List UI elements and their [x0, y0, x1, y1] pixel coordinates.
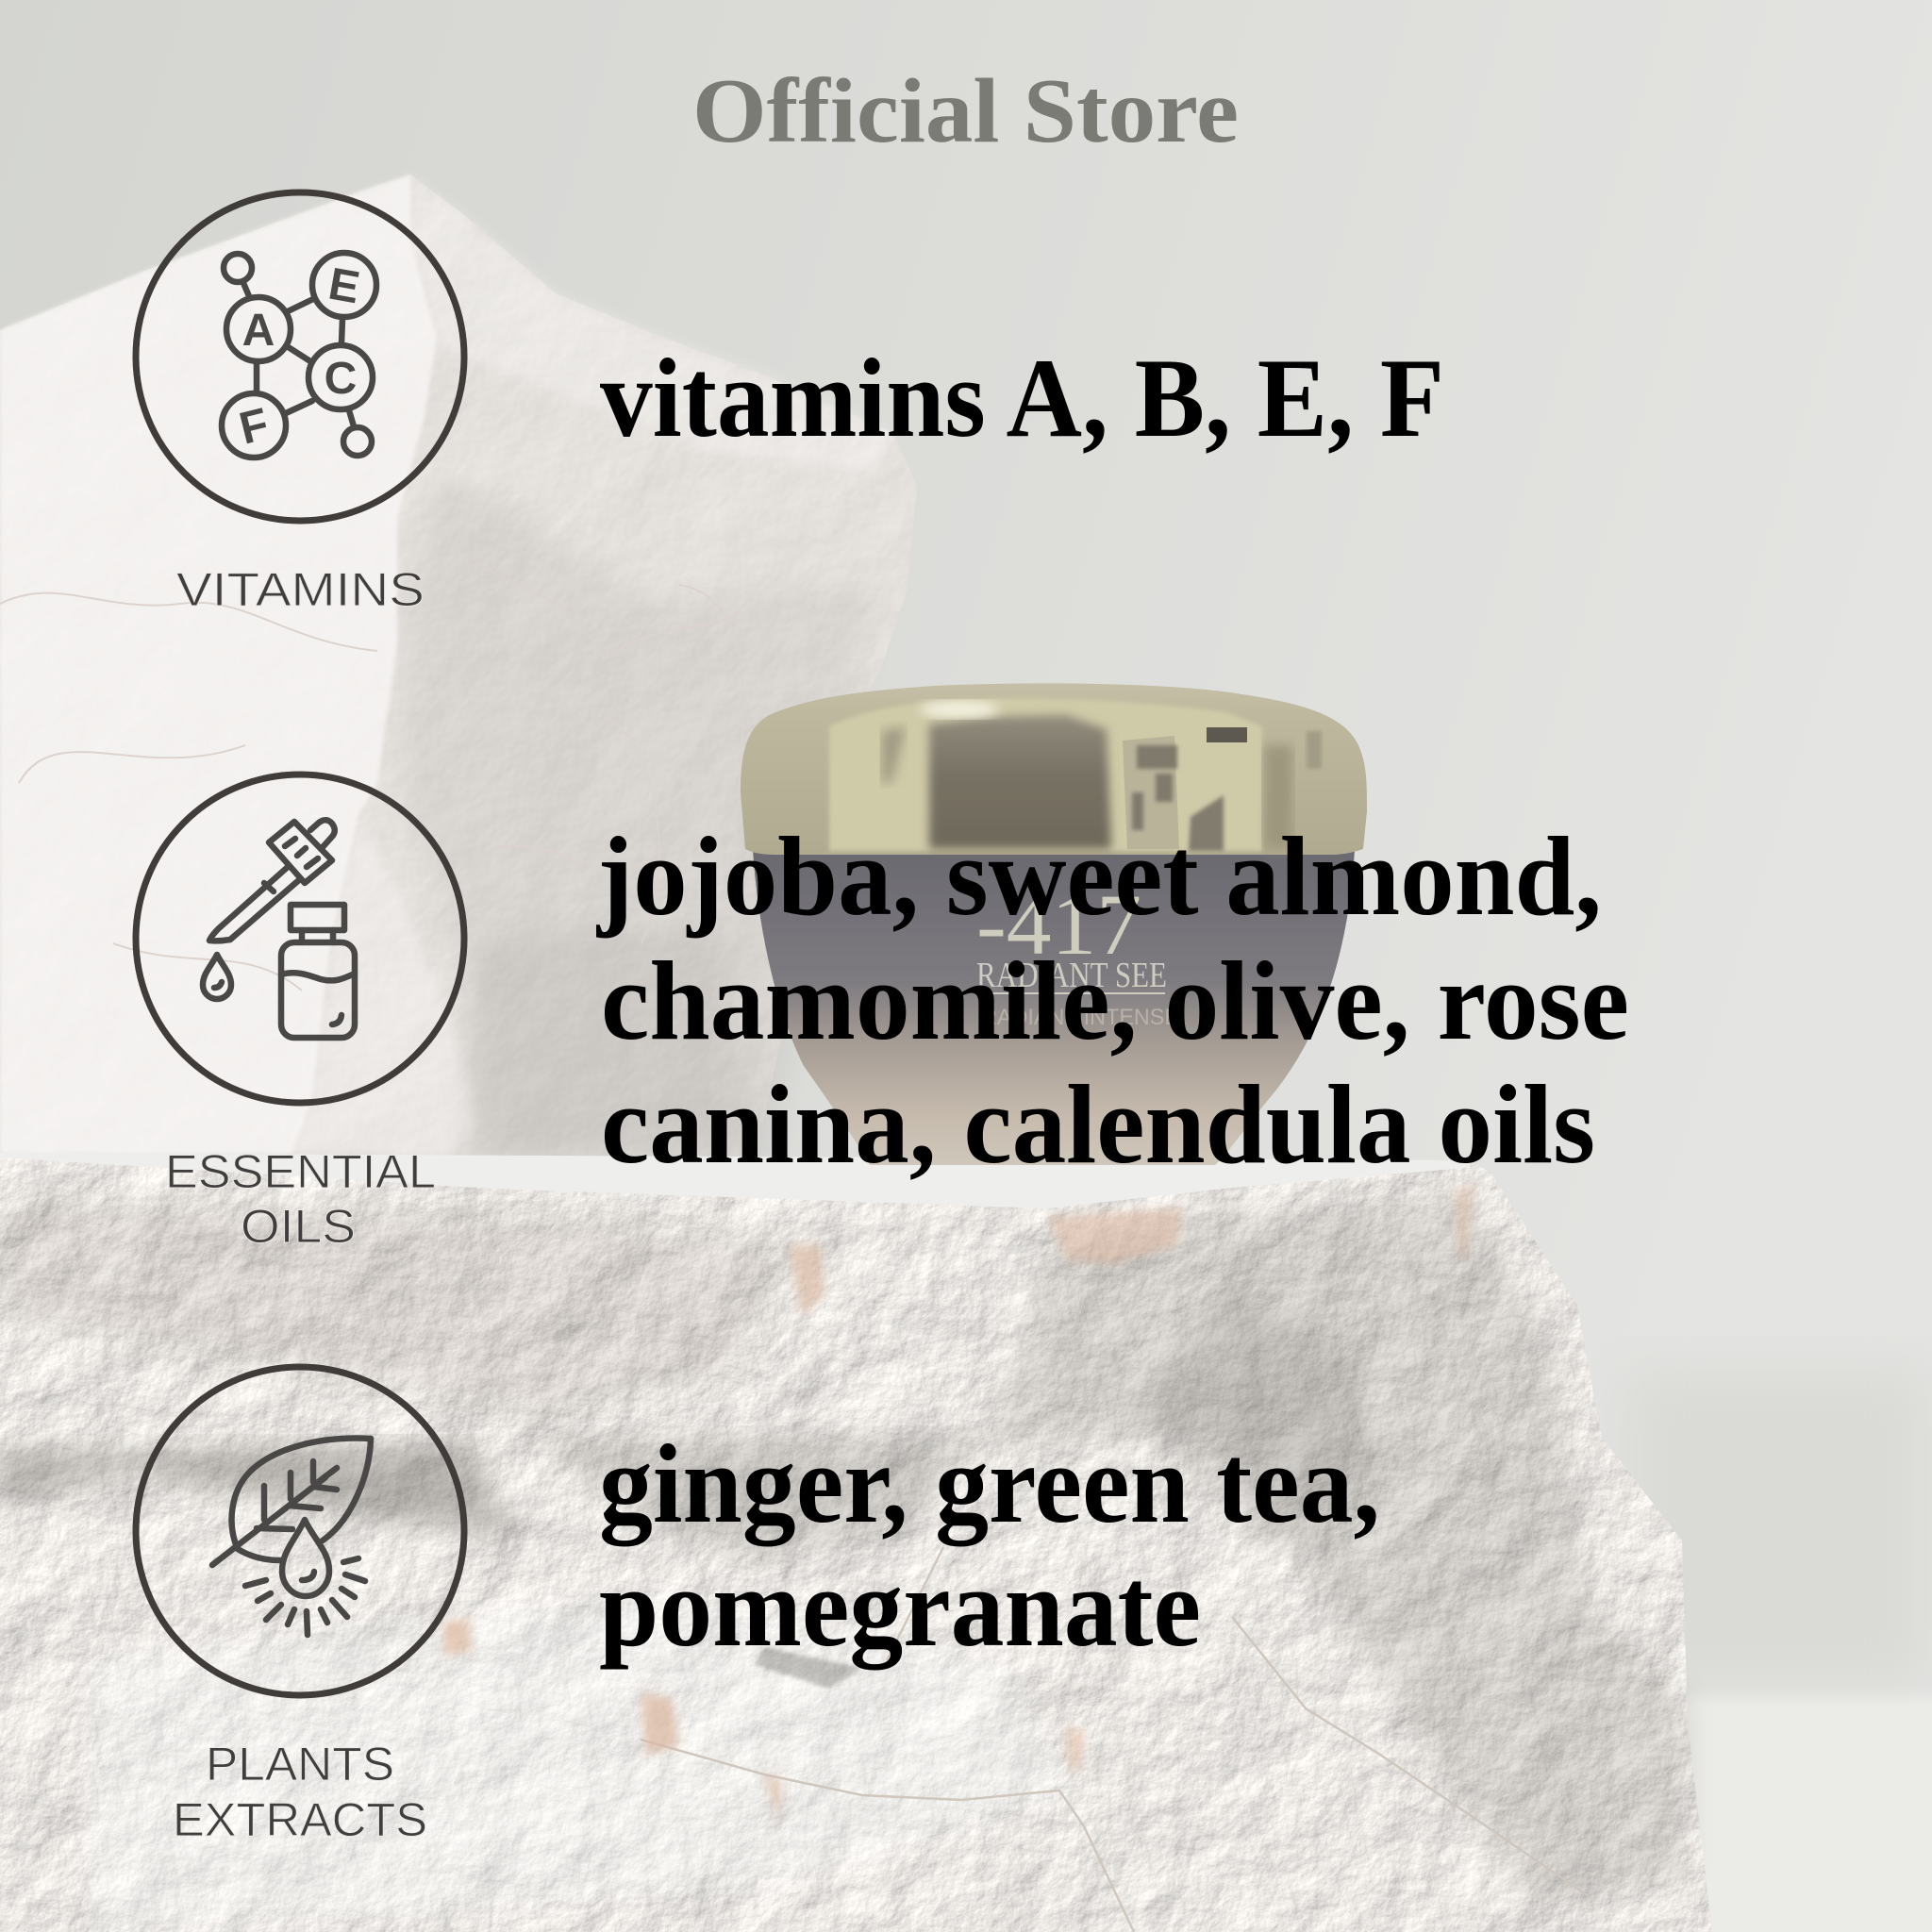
text: oils list: jojoba, sweet almond,: [596, 813, 1602, 939]
text: oils list: canina, calendula oils: [601, 1061, 1595, 1187]
panel: essential oils: [136, 774, 1629, 1253]
jar: RADIANT INTENSE: [981, 1005, 1179, 1030]
label: essential oils: [165, 1145, 436, 1253]
text: oils list: [596, 813, 1629, 1187]
label: vitamins: VITAMINS: [176, 563, 425, 616]
icon: dropper and bottle: [136, 774, 464, 1103]
upper stone block: [0, 175, 917, 1170]
title: Official Store: [692, 60, 1239, 162]
label: plants extracts: [173, 1738, 427, 1846]
text: oils list: chamomile, olive, rose: [601, 938, 1629, 1063]
text: plants list: pomegranate: [599, 1544, 1201, 1671]
jar: -417: [976, 876, 1141, 973]
jar: [741, 683, 1367, 1165]
icon: vitamin molecules: C: [325, 354, 357, 404]
icon: vitamin molecules: F: [235, 399, 274, 455]
panel: vitamins: [136, 192, 1444, 616]
icon: vitamin molecules: E: [325, 259, 363, 313]
label: essential oils: OILS: [241, 1200, 356, 1253]
text: vitamins list: vitamins A, B, E, F: [600, 335, 1444, 460]
icon: vitamin molecules: A: [242, 306, 275, 356]
panel: plant extracts: [136, 1367, 1380, 1846]
label: plants extracts: EXTRACTS: [173, 1793, 427, 1846]
lower stone block: [0, 1153, 1712, 1932]
jar: RADIANT SEE: [976, 956, 1167, 995]
label: essential oils: ESSENTIAL: [165, 1145, 436, 1198]
text: plants list: ginger, green tea,: [599, 1421, 1380, 1547]
icon: vitamin molecules: [136, 192, 464, 521]
text: plants list: [599, 1421, 1380, 1671]
icon: leaf and drop: [136, 1367, 464, 1695]
label: plants extracts: PLANTS: [206, 1738, 394, 1790]
